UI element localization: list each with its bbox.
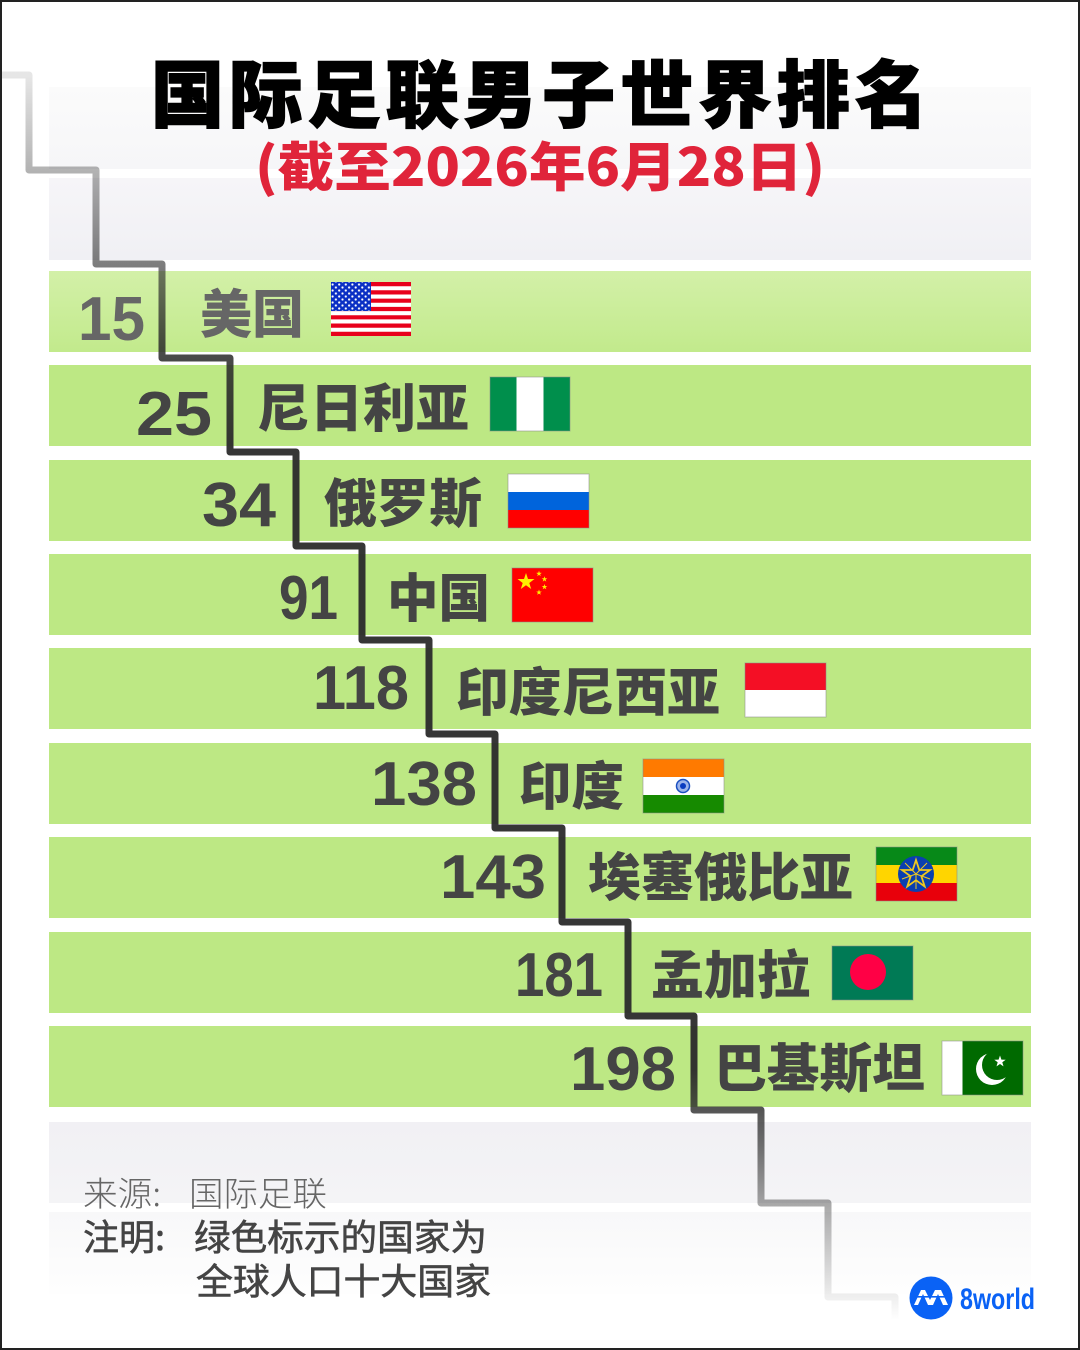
flag: Ethiopia xyxy=(876,847,957,901)
rank 15: USA: 15 xyxy=(78,285,145,354)
rank 25: Nigeria: 尼日利亚 xyxy=(257,367,469,442)
source note: 来源: xyxy=(83,1167,161,1216)
rank 198: Pakistan: 198 xyxy=(570,1035,676,1104)
rank 15: USA xyxy=(78,273,411,354)
rank 34: Russia xyxy=(202,462,589,540)
rank 181: Bangladesh: 181 xyxy=(515,941,603,1010)
rank 34: Russia: 俄罗斯 xyxy=(324,462,482,537)
subtitle: (截至2026年6月28日) xyxy=(255,126,825,202)
rank 34: Russia: 34 xyxy=(202,471,277,540)
rank 138: India: 印度 xyxy=(519,745,624,820)
explanatory note: 绿色标示的国家为 xyxy=(194,1209,487,1261)
flag: Russia xyxy=(508,474,589,528)
source note: 国际足联 xyxy=(189,1167,327,1216)
rank 181: Bangladesh: 孟加拉 xyxy=(651,934,810,1009)
rank 118: Indonesia xyxy=(313,651,826,726)
rank 91: China xyxy=(279,557,593,633)
rank 118: Indonesia: 印度尼西亚 xyxy=(456,651,720,726)
rank 181: Bangladesh xyxy=(515,934,913,1010)
rank 198: Pakistan xyxy=(570,1027,1023,1104)
rank 143: Ethiopia: 143 xyxy=(440,843,546,912)
rank 118: Indonesia: 118 xyxy=(313,654,409,723)
rank 91: China: 91 xyxy=(279,564,338,633)
staircase line xyxy=(0,75,895,1320)
bottom fade bands xyxy=(49,1122,1031,1294)
rank 198: Pakistan: 巴基斯坦 xyxy=(714,1027,925,1102)
flag: China xyxy=(512,568,593,622)
source note xyxy=(83,1167,327,1216)
top fade bands xyxy=(49,87,1031,260)
explanatory note xyxy=(83,1209,491,1305)
rank 25: Nigeria: 25 xyxy=(136,380,212,449)
rank 138: India: 138 xyxy=(371,750,477,819)
green ranking rows xyxy=(49,271,1031,1107)
rank 15: USA: 美国 xyxy=(200,273,304,348)
flag: India xyxy=(643,759,724,813)
flag: USA xyxy=(331,282,411,336)
explanatory note: 全球人口十大国家 xyxy=(196,1253,491,1305)
rank 91: China: 中国 xyxy=(387,557,490,632)
rank 143: Ethiopia xyxy=(440,836,957,912)
flag: Pakistan xyxy=(942,1041,1023,1095)
logo: 8world: 8world xyxy=(960,1283,1035,1316)
logo: 8world xyxy=(910,1276,1035,1320)
flag: Bangladesh xyxy=(832,946,913,1000)
rank 25: Nigeria xyxy=(136,367,570,449)
flag: Indonesia xyxy=(745,663,826,717)
explanatory note: 注明: xyxy=(83,1209,165,1261)
rank 143: Ethiopia: 埃塞俄比亚 xyxy=(588,836,853,911)
title: 国际足联男子世界排名 xyxy=(151,37,928,143)
rank 138: India xyxy=(371,745,724,820)
flag: Nigeria xyxy=(490,377,570,431)
